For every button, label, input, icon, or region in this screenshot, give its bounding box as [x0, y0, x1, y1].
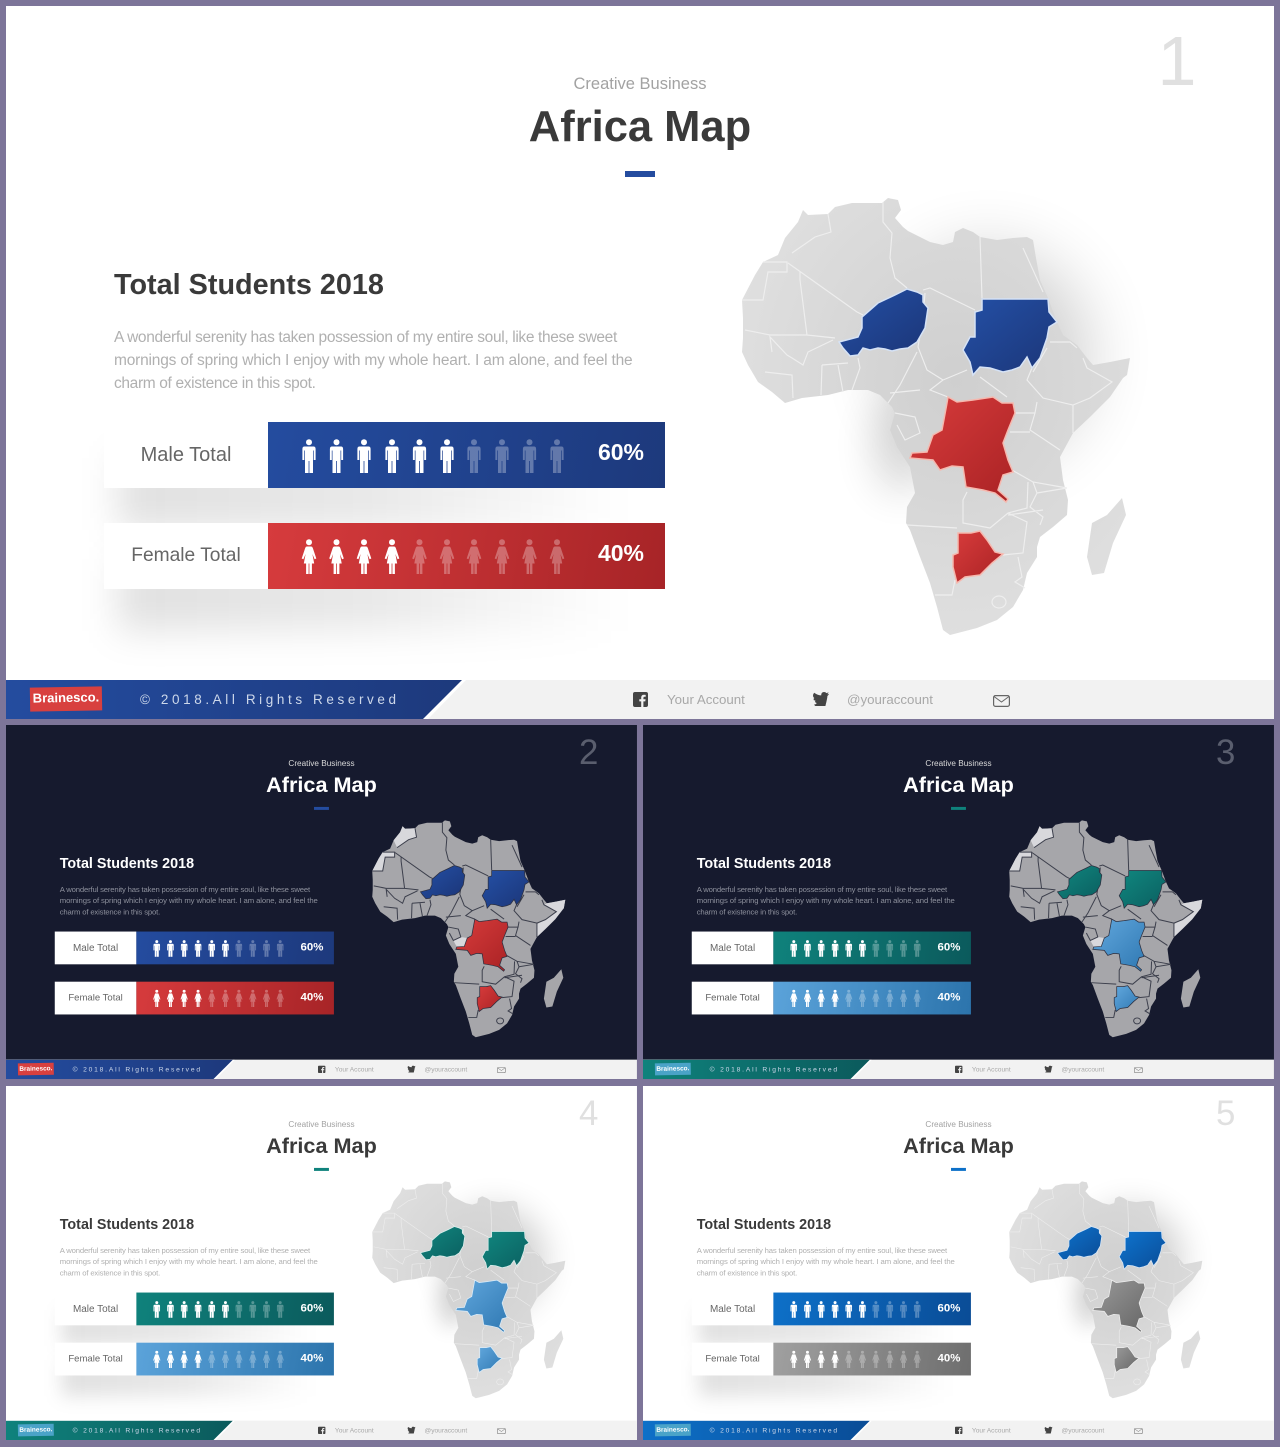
icon: twitter [1044, 1426, 1052, 1434]
label: female [104, 523, 268, 589]
heading: Total Students 2018 [697, 856, 831, 871]
label: female: Female Total [705, 993, 760, 1003]
body text: A wonderful serenity has taken possession of my entire soul, like these sweet [114, 329, 617, 346]
icon: twitter [408, 1426, 416, 1434]
country: DR Congo [910, 397, 1015, 502]
icon: mail [1134, 1067, 1142, 1073]
subtitle: Creative Business [925, 759, 992, 768]
country: DR Congo [1093, 919, 1145, 971]
logo: Brainesco. [656, 1425, 689, 1433]
body text: charm of existence in this spot. [114, 375, 316, 392]
body text: charm of existence in this spot. [60, 908, 160, 917]
icon: mail [1134, 1428, 1142, 1434]
slide 3: dark teal and sky blue [643, 725, 1274, 1079]
footer [6, 1421, 637, 1440]
label: male [55, 932, 136, 964]
bar: female 40% [136, 1343, 334, 1375]
slide number: 2 [579, 733, 598, 772]
logo: Brainesco. [19, 1064, 52, 1072]
account text: Your Account [335, 1427, 374, 1434]
country: Niger [421, 1227, 465, 1260]
slide number: 4 [579, 1094, 598, 1133]
handle text: @youraccount [424, 1427, 467, 1434]
bar: female 40% [136, 982, 334, 1014]
account text: Your Account [972, 1427, 1011, 1434]
body text: mornings of spring which I enjoy with my whole heart. I am alone, and feel the [60, 897, 318, 905]
label: female: Female Total [131, 545, 241, 566]
heading: Total Students 2018 [60, 856, 194, 871]
body text: A wonderful serenity has taken possession of my entire soul, like these sweet [697, 1246, 947, 1255]
logo [30, 686, 102, 712]
copyright: © 2018.All Rights Reserved [140, 692, 400, 707]
label: male: Male Total [710, 1303, 755, 1314]
country: Sudan [1119, 870, 1166, 908]
stat row: male total [55, 1293, 334, 1325]
value: 40% [301, 1351, 323, 1364]
value: 60% [938, 1301, 960, 1314]
label: female [55, 982, 136, 1014]
icon: facebook [318, 1426, 326, 1434]
label: male [55, 1293, 136, 1325]
map: Africa [1009, 1182, 1202, 1398]
pictogram: 6 of 10 men [154, 940, 284, 957]
pictogram: 6 of 10 men [154, 1301, 284, 1318]
value: 40% [301, 990, 323, 1003]
footer [6, 680, 1274, 719]
stat row: female total [692, 982, 971, 1014]
label: male: Male Total [73, 942, 118, 953]
map: Africa [372, 820, 566, 1038]
stat row: male total [104, 422, 665, 488]
title: Africa Map [529, 103, 751, 151]
stat row: male total [54, 932, 334, 964]
value: 40% [938, 1351, 960, 1364]
country: Niger [839, 289, 928, 356]
title: Africa Map [903, 773, 1014, 797]
country: Sudan [482, 870, 529, 908]
country: Niger [421, 866, 465, 899]
bar: female 40% [773, 1343, 971, 1375]
label: male [692, 932, 773, 964]
body text [114, 329, 632, 392]
value: 60% [598, 439, 644, 465]
body text: mornings of spring which I enjoy with my whole heart. I am alone, and feel the [60, 1258, 318, 1266]
body text: charm of existence in this spot. [697, 1269, 797, 1278]
label: male: Male Total [710, 942, 755, 953]
map: Africa [742, 198, 1130, 635]
title accent bar [625, 171, 655, 177]
subtitle: Creative Business [288, 1120, 355, 1129]
heading: Total Students 2018 [60, 1217, 194, 1232]
icon: facebook [955, 1426, 962, 1434]
stat row: female total [104, 523, 665, 589]
pictogram: 6 of 10 men [790, 940, 920, 957]
stat row: male total [692, 1293, 971, 1325]
body text [696, 885, 955, 917]
stat row: female total [55, 1343, 334, 1375]
pictogram: 4 of 10 women [153, 1350, 284, 1368]
body text: A wonderful serenity has taken possession of my entire soul, like these sweet [60, 885, 310, 894]
label: male [692, 1293, 773, 1325]
handle text: @youraccount [1061, 1066, 1104, 1073]
slide number: 3 [1216, 733, 1235, 772]
bar: male 60% [773, 932, 971, 964]
pictogram: 4 of 10 women [302, 539, 564, 574]
title: Africa Map [266, 773, 377, 797]
label: female: Female Total [68, 993, 123, 1003]
country: DR Congo [456, 1280, 508, 1332]
slide number: 5 [1216, 1094, 1235, 1133]
body text: A wonderful serenity has taken possession of my entire soul, like these sweet [697, 885, 947, 894]
pictogram: 4 of 10 women [153, 990, 284, 1007]
label: female: Female Total [705, 1354, 760, 1364]
pictogram: 4 of 10 women [790, 990, 921, 1007]
slide 2: dark red and blue [6, 725, 637, 1079]
bar: male 60% [773, 1293, 971, 1325]
icon: mail [497, 1428, 506, 1434]
handle text: @youraccount [424, 1066, 467, 1073]
title accent bar [951, 1168, 966, 1171]
title: Africa Map [266, 1134, 377, 1158]
value: 60% [301, 1301, 323, 1314]
icon: twitter [1044, 1066, 1052, 1072]
country: Botswana [477, 986, 502, 1011]
logo [18, 1063, 54, 1075]
body text [60, 1246, 318, 1278]
pictogram: 6 of 10 men [790, 1301, 920, 1318]
country: Botswana [1114, 1347, 1139, 1372]
subtitle: Creative Business [574, 75, 706, 93]
slide 4: light teal and sky blue [6, 1086, 637, 1440]
stat row: male total [692, 932, 971, 964]
country: Botswana [1114, 986, 1139, 1011]
title accent bar [314, 807, 329, 810]
body text: charm of existence in this spot. [60, 1269, 160, 1278]
copyright: © 2018.All Rights Reserved [710, 1427, 839, 1434]
country: Botswana [477, 1347, 502, 1372]
body text: A wonderful serenity has taken possession of my entire soul, like these sweet [60, 1246, 310, 1255]
country: Sudan [963, 299, 1057, 375]
logo [18, 1424, 54, 1436]
logo [655, 1424, 691, 1436]
value: 60% [938, 940, 960, 953]
heading: Total Students 2018 [114, 269, 384, 301]
footer [643, 1421, 1274, 1440]
icon: mail [497, 1067, 506, 1073]
body text: mornings of spring which I enjoy with my whole heart. I am alone, and feel the [697, 897, 955, 905]
account text: Your Account [667, 692, 745, 707]
copyright: © 2018.All Rights Reserved [73, 1066, 202, 1073]
title: Africa Map [903, 1134, 1014, 1158]
pictogram: 4 of 10 women [790, 1350, 921, 1368]
label: female [692, 982, 773, 1014]
body text [696, 1246, 955, 1278]
slide number: 1 [1158, 22, 1196, 100]
value: 40% [598, 540, 644, 566]
body text [60, 885, 318, 917]
label: female [55, 1343, 136, 1375]
value: 40% [938, 990, 960, 1003]
body text: mornings of spring which I enjoy with my whole heart. I am alone, and feel the [114, 352, 632, 369]
account text: Your Account [972, 1066, 1011, 1073]
title accent bar [314, 1168, 329, 1171]
country: Sudan [482, 1231, 529, 1269]
bar: female 40% [773, 982, 971, 1014]
icon: facebook [955, 1066, 962, 1073]
bar: female 40% [268, 523, 665, 589]
label: female: Female Total [68, 1354, 123, 1364]
stat row: female total [54, 982, 334, 1014]
footer [6, 1060, 637, 1079]
heading: Total Students 2018 [697, 1217, 831, 1232]
label: male [104, 422, 268, 488]
logo [655, 1063, 691, 1075]
pictogram: 6 of 10 men [302, 439, 564, 473]
map: Africa [1009, 820, 1202, 1038]
subtitle: Creative Business [288, 759, 355, 768]
country: Niger [1058, 866, 1102, 899]
logo: Brainesco. [33, 689, 99, 706]
country: DR Congo [456, 919, 508, 971]
title accent bar [951, 807, 966, 810]
stat row: female total [692, 1343, 971, 1375]
handle text: @youraccount [847, 692, 933, 707]
label: male: Male Total [73, 1303, 118, 1314]
country: Niger [1058, 1227, 1102, 1260]
logo: Brainesco. [656, 1064, 689, 1072]
logo: Brainesco. [19, 1425, 52, 1433]
map: Africa [372, 1182, 566, 1398]
country: Botswana [953, 531, 1003, 583]
copyright: © 2018.All Rights Reserved [710, 1066, 839, 1073]
country: Sudan [1119, 1231, 1166, 1269]
icon: twitter [813, 692, 829, 706]
icon: facebook [318, 1066, 326, 1073]
account text: Your Account [335, 1066, 374, 1073]
subtitle: Creative Business [925, 1120, 992, 1129]
icon: mail [993, 695, 1010, 707]
slide 1: large light red and blue [6, 6, 1274, 719]
bar: male 60% [136, 1293, 334, 1325]
footer [643, 1060, 1274, 1079]
icon: twitter [408, 1066, 416, 1072]
icon: facebook [633, 692, 648, 707]
body text: mornings of spring which I enjoy with my whole heart. I am alone, and feel the [697, 1258, 955, 1266]
handle text: @youraccount [1061, 1427, 1104, 1434]
bar: male 60% [268, 422, 665, 488]
label: male: Male Total [141, 444, 231, 466]
label: female [692, 1343, 773, 1375]
slide 5: light blue and gray [643, 1086, 1274, 1440]
country: DR Congo [1093, 1280, 1145, 1332]
value: 60% [301, 940, 323, 953]
body text: charm of existence in this spot. [697, 908, 797, 917]
copyright: © 2018.All Rights Reserved [73, 1427, 202, 1434]
bar: male 60% [136, 932, 334, 964]
